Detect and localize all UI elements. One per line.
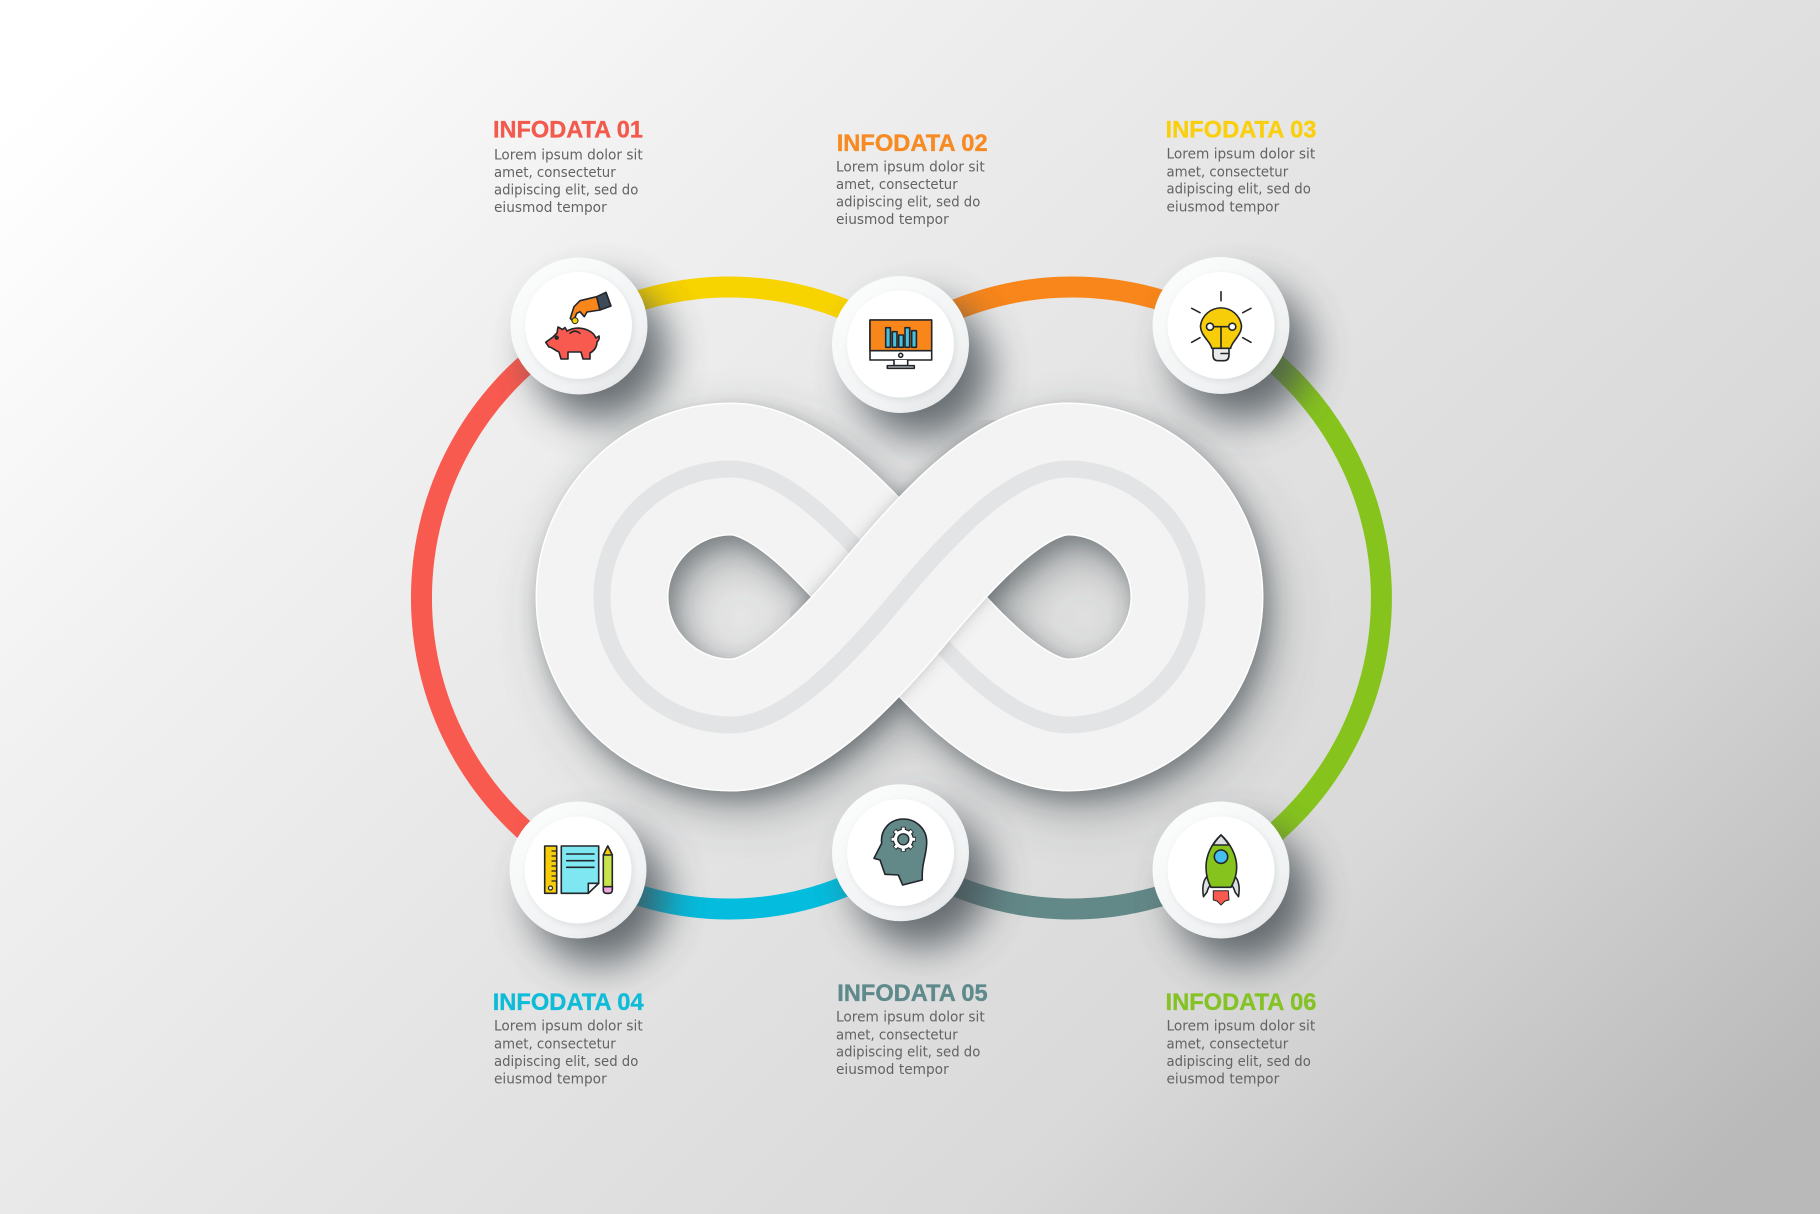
body 03 [1166, 146, 1315, 215]
heading 01: INFODATA 01 [493, 117, 643, 144]
node 6: rocket [1152, 802, 1290, 938]
arc: slate [900, 857, 1222, 909]
arc: green [1222, 326, 1381, 870]
arc: yellow [578, 287, 900, 339]
body 05: eiusmod tempor [836, 1061, 949, 1078]
body 05: Lorem ipsum dolor sit [836, 1009, 985, 1026]
body 05: adipiscing elit, sed do [836, 1044, 980, 1061]
heading 03: INFODATA 03 [1166, 116, 1316, 144]
node 2: monitor [832, 276, 969, 413]
node 1: savings [510, 258, 648, 394]
text block: infodata 04 [493, 989, 644, 1087]
body 06: eiusmod tempor [1166, 1070, 1279, 1087]
body 04: eiusmod tempor [494, 1070, 607, 1087]
node 5: head with gear [832, 784, 969, 921]
body 06: adipiscing elit, sed do [1166, 1053, 1311, 1070]
infinity symbol [602, 469, 1210, 745]
text block: infodata 01 [493, 117, 643, 216]
body 03: Lorem ipsum dolor sit [1166, 146, 1315, 163]
body 02: Lorem ipsum dolor sit [836, 158, 985, 175]
body 04: amet, consectetur [494, 1035, 616, 1052]
body 06: Lorem ipsum dolor sit [1166, 1018, 1315, 1035]
body 01 [494, 146, 643, 216]
body 02: eiusmod tempor [836, 211, 949, 228]
icon: piggy bank and hand [546, 292, 611, 359]
body 02 [836, 158, 985, 228]
heading 04: INFODATA 04 [493, 989, 644, 1016]
text block: infodata 05 [836, 980, 988, 1078]
heading 05: INFODATA 05 [837, 980, 988, 1007]
text block: infodata 03 [1166, 116, 1316, 215]
icon: light bulb [1192, 292, 1251, 361]
arc: blue [578, 857, 900, 909]
body 04 [494, 1018, 643, 1087]
infinity back strand [602, 469, 1197, 725]
node 4: documents [510, 802, 646, 938]
body 04: adipiscing elit, sed do [494, 1053, 638, 1070]
body 01: eiusmod tempor [494, 199, 607, 216]
body 06: amet, consectetur [1166, 1035, 1288, 1052]
body 05 [836, 1009, 985, 1078]
icon: monitor chart [870, 320, 932, 368]
body 05: amet, consectetur [836, 1026, 958, 1043]
body 01: Lorem ipsum dolor sit [494, 146, 643, 163]
heading 06: INFODATA 06 [1166, 989, 1316, 1016]
body 03: amet, consectetur [1166, 163, 1288, 180]
text block: infodata 06 [1166, 989, 1316, 1087]
infinity front strand [731, 469, 1068, 725]
body 03: adipiscing elit, sed do [1166, 181, 1311, 198]
body 03: eiusmod tempor [1166, 198, 1279, 215]
outer ring of coloured arcs [421, 287, 1381, 909]
body 01: amet, consectetur [494, 164, 616, 181]
node 3: light bulb [1152, 257, 1290, 394]
crossing shadow [731, 469, 1068, 725]
body 02: amet, consectetur [836, 176, 958, 193]
heading 02: INFODATA 02 [837, 130, 988, 157]
infinity cast shadow [608, 478, 1210, 745]
icon: rocket [1203, 835, 1239, 905]
body 02: adipiscing elit, sed do [836, 194, 980, 210]
arc: red [421, 327, 578, 869]
node cast shadows [531, 284, 1310, 964]
body 06 [1166, 1018, 1315, 1087]
arc: orange [900, 287, 1222, 339]
body 01: adipiscing elit, sed do [494, 181, 638, 198]
icon: head and gear [874, 819, 927, 885]
body 04: Lorem ipsum dolor sit [494, 1018, 643, 1035]
text block: infodata 02 [836, 130, 988, 228]
icon: ruler, paper, pencil [545, 846, 612, 893]
